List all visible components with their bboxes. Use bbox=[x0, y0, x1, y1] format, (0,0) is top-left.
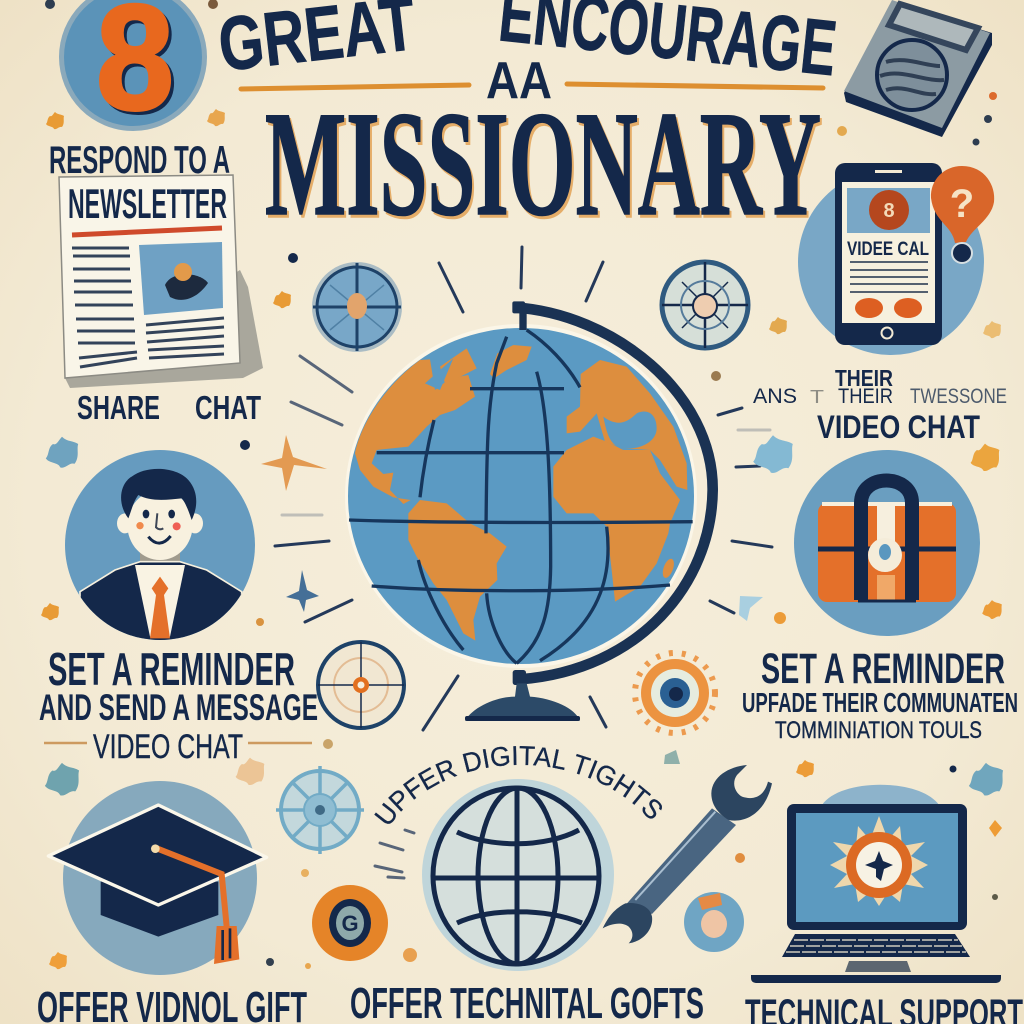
icon: globe stand bbox=[465, 301, 713, 721]
radiating lines around globe bbox=[275, 247, 772, 878]
label: set a reminder left: AND SEND A MESSAGE bbox=[39, 687, 318, 728]
icon: orange coin: G bbox=[341, 911, 359, 936]
label: share chat: SHARE bbox=[77, 389, 160, 426]
label: respond to a newsletter: RESPOND TO A bbox=[49, 139, 230, 182]
icon: businessman portrait bbox=[65, 450, 255, 643]
icon: video call phone bbox=[798, 163, 994, 355]
icon: wrench bbox=[603, 765, 772, 943]
icon: orange sun lens bbox=[635, 653, 715, 733]
label: answer their message: ANS bbox=[753, 385, 797, 408]
label: set a reminder left: SET A REMINDER bbox=[48, 643, 295, 695]
continents bbox=[355, 345, 687, 641]
curved label: offer digital gifts: UPFER DIGITAL TIGHTS bbox=[374, 746, 662, 824]
badge: number 8 bbox=[59, 0, 207, 144]
icon: small gift badge bbox=[684, 892, 744, 952]
icon: laptop bbox=[751, 785, 1001, 983]
title bbox=[214, 0, 841, 247]
label: answer their message bbox=[753, 365, 1007, 445]
title: AA bbox=[486, 52, 552, 110]
scattered decorative marks left bbox=[41, 0, 417, 969]
label: share chat: CHAT bbox=[195, 389, 261, 426]
icon: safe / padlock device bbox=[844, 0, 992, 137]
label: set a reminder left bbox=[39, 643, 318, 766]
label: share chat bbox=[77, 389, 261, 426]
icon: newsletter bbox=[59, 175, 263, 388]
icon: compass lower left bbox=[318, 642, 404, 728]
icon: briefcase bbox=[794, 450, 980, 636]
label: answer their message: THEIR bbox=[838, 385, 893, 408]
icon: compass left bbox=[312, 262, 402, 352]
graticule bbox=[349, 330, 693, 663]
icon: globe bbox=[345, 324, 697, 668]
label: answer their message: THEIR bbox=[835, 365, 893, 391]
icon: graduation cap bbox=[48, 781, 267, 975]
label: set a reminder right bbox=[742, 645, 1018, 744]
icon: video call phone: 8 bbox=[883, 200, 895, 222]
icon: star left bbox=[261, 435, 327, 491]
icon: wireframe globe bbox=[422, 779, 614, 971]
icon: orange coin bbox=[312, 885, 388, 961]
icon: video call phone: VIDEE CAL bbox=[847, 239, 929, 260]
label: answer their message: VIDEO CHAT bbox=[817, 409, 980, 445]
icon: video call phone: ? bbox=[950, 182, 974, 226]
label: answer their message: T bbox=[810, 387, 824, 407]
icon: newsletter: NEWSLETTER bbox=[68, 180, 227, 227]
scattered decorative marks right bbox=[664, 92, 1003, 900]
label: set a reminder left: VIDEO CHAT bbox=[93, 728, 243, 766]
icon: blue wheel bbox=[276, 766, 364, 854]
icon: compass right bbox=[662, 262, 748, 348]
